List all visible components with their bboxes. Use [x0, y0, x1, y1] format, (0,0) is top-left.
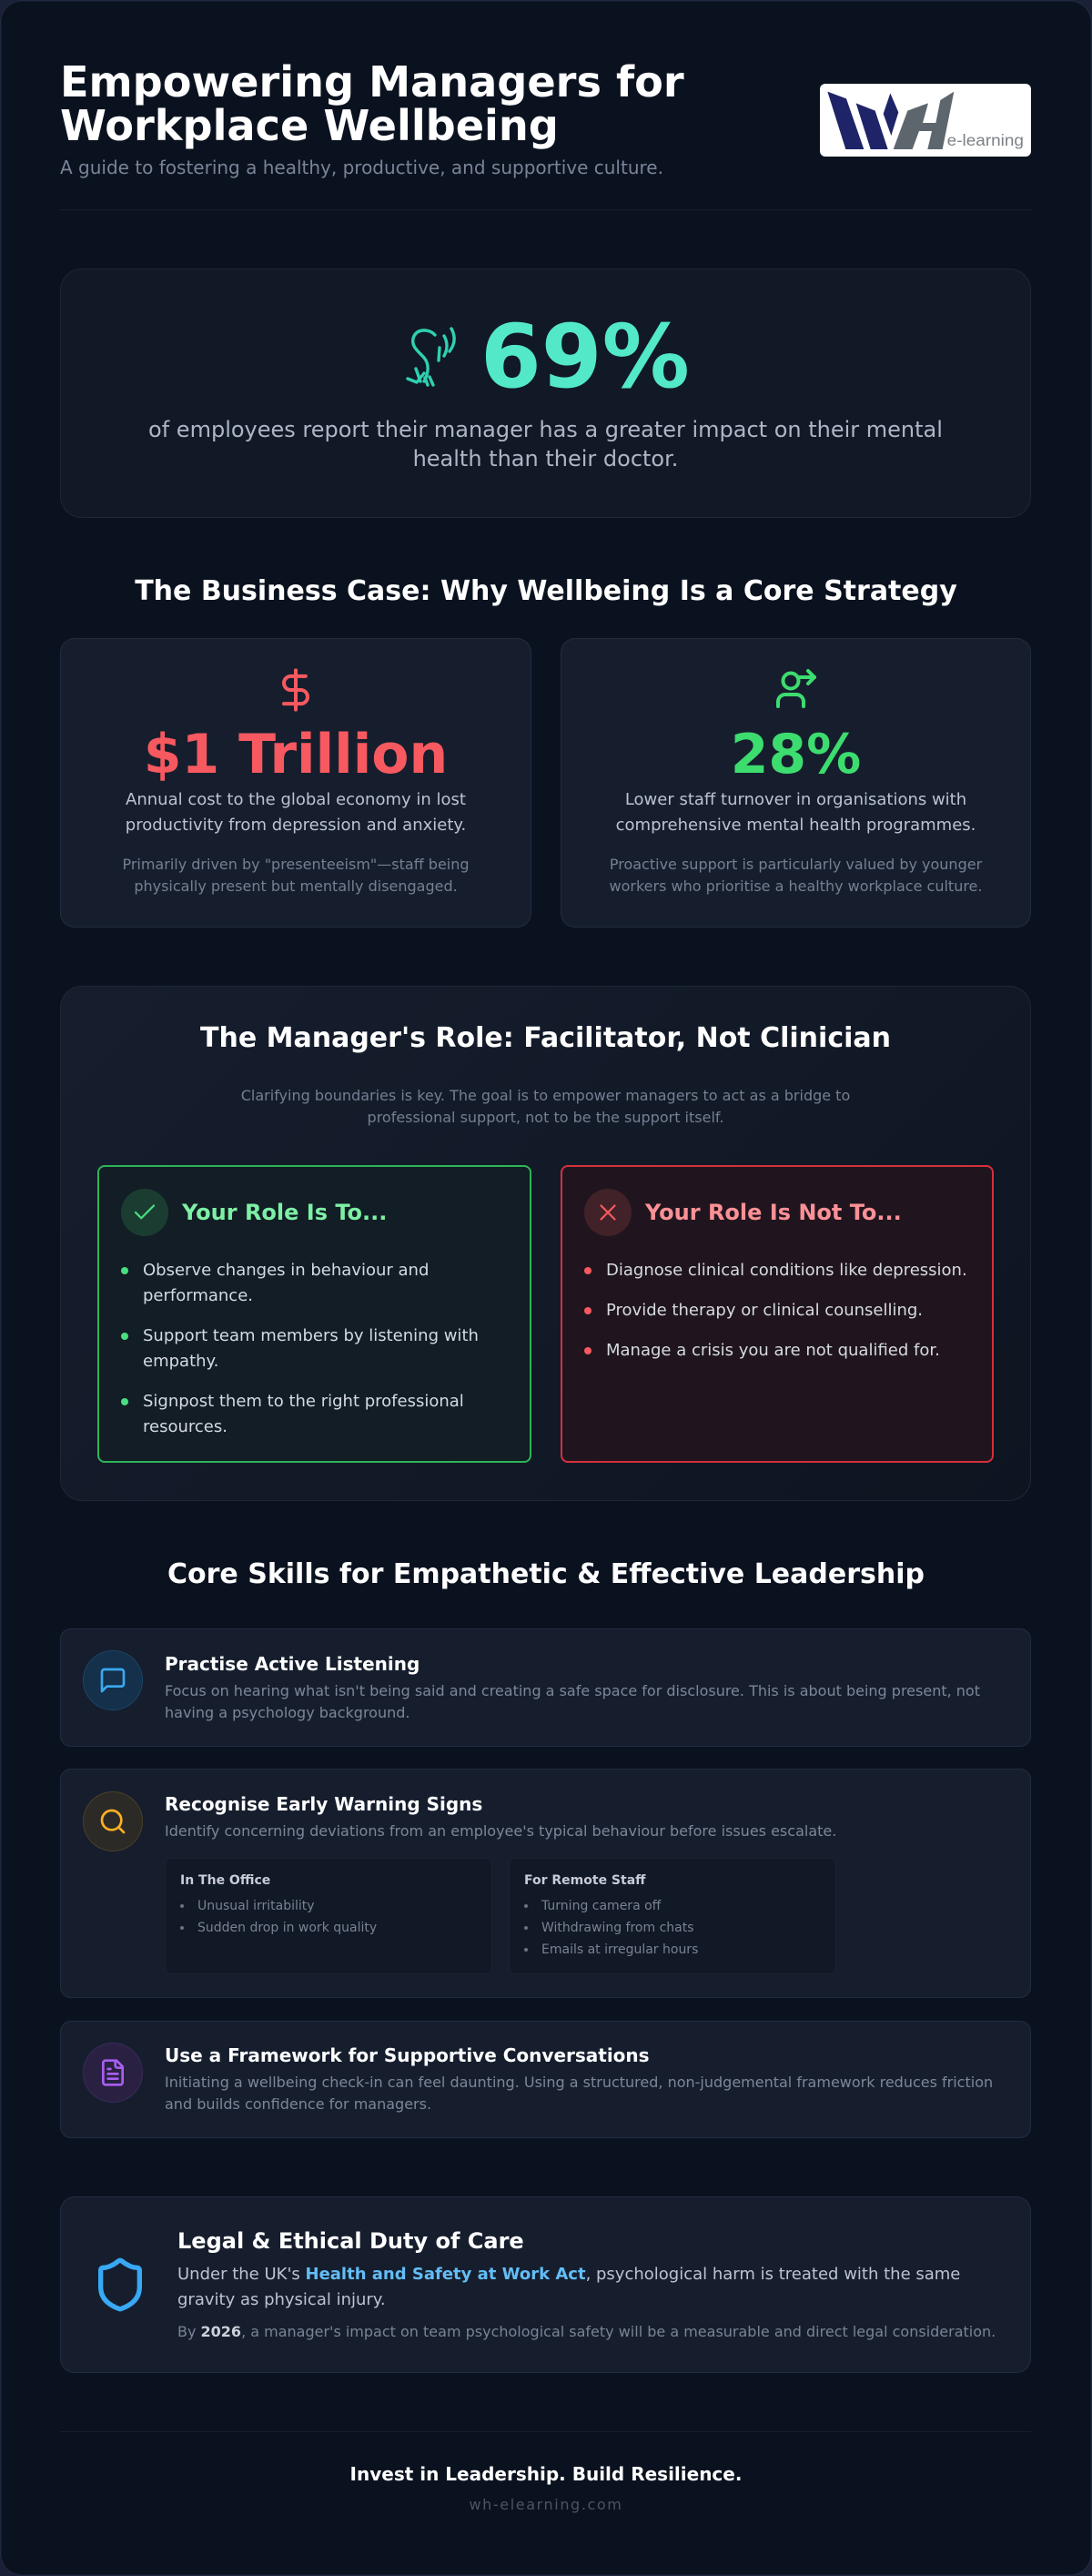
skill title: Use a Framework for Supportive Conversations — [165, 2044, 650, 2066]
note: Primarily driven by "presenteeism"—staff being — [122, 856, 470, 873]
sub heading: In The Office — [180, 1873, 270, 1888]
heading: The Manager's Role: Facilitator, Not Clinician — [200, 1022, 891, 1054]
big number: 69% — [480, 306, 690, 408]
panel: turnover stat — [561, 638, 1031, 928]
subtitle: A guide to fostering a healthy, productive, and supportive culture. — [60, 157, 663, 178]
hero text — [148, 417, 943, 472]
panel: legal duty of care — [60, 2196, 1031, 2373]
list items: empathy. — [143, 1352, 218, 1371]
panel: not your role — [561, 1165, 994, 1463]
icon: check — [121, 1189, 168, 1236]
logo: WH e-learning — [820, 84, 1031, 157]
sub heading: For Remote Staff — [524, 1873, 646, 1888]
description: productivity from depression and anxiety. — [126, 816, 466, 835]
icon: dollar — [282, 668, 309, 712]
number: $1 Trillion — [144, 723, 448, 786]
not role list contents — [584, 1189, 967, 1360]
icon: chat bubble — [83, 1650, 143, 1710]
heading: business case: The Business Case: Why Wellbeing Is a Core Strategy — [135, 575, 957, 607]
skill text: Focus on hearing what isn't being said and creating a safe space for disclosure. This is about being present, not — [165, 1682, 980, 1699]
logo: WH e-learning: e-learning — [947, 131, 1024, 149]
list: Unusual irritability — [197, 1899, 315, 1913]
panel: early warning signs — [60, 1769, 1031, 1998]
icon: shield — [98, 2257, 142, 2312]
title: Workplace Wellbeing — [60, 101, 559, 150]
panel: framework — [60, 2021, 1031, 2138]
skill text — [165, 2074, 993, 2113]
role list contents — [121, 1189, 479, 1436]
hero text: of employees report their manager has a greater impact on their mental — [148, 417, 943, 442]
legal text: gravity as physical injury. — [177, 2290, 386, 2309]
skill title: Practise Active Listening — [165, 1653, 420, 1675]
skill text: and builds confidence for managers. — [165, 2095, 431, 2113]
icon: magnifier — [83, 1791, 143, 1851]
list — [180, 1899, 377, 1935]
list: Turning camera off — [541, 1899, 661, 1913]
panel: your role — [97, 1165, 531, 1463]
number: 28% — [731, 723, 861, 786]
list items: Manage a crisis you are not qualified for. — [606, 1341, 940, 1360]
list: Withdrawing from chats — [541, 1921, 694, 1935]
description: Lower staff turnover in organisations with — [625, 790, 966, 809]
legal text — [177, 2265, 960, 2309]
sub-panel: remote staff — [509, 1858, 836, 1974]
skill title: Recognise Early Warning Signs — [165, 1793, 482, 1815]
sub-panel: in the office — [165, 1858, 492, 1974]
description: comprehensive mental health programmes. — [616, 816, 976, 835]
list items — [584, 1261, 967, 1360]
heading: Your Role Is Not To... — [645, 1200, 902, 1225]
list items: Provide therapy or clinical counselling. — [606, 1301, 923, 1320]
skill text: Initiating a wellbeing check-in can feel daunting. Using a structured, non-judgemental framework reduces friction — [165, 2074, 993, 2091]
icon: cross — [584, 1189, 632, 1236]
list items: Signpost them to the right professional — [143, 1392, 464, 1411]
list: Emails at irregular hours — [541, 1942, 698, 1957]
panel: active listening — [60, 1628, 1031, 1747]
heading: Your Role Is To... — [182, 1200, 387, 1225]
skill text: Identify concerning deviations from an employee's typical behaviour before issues escalate. — [165, 1822, 836, 1839]
title: Empowering Managers for — [60, 57, 684, 106]
description — [616, 790, 976, 835]
description — [126, 790, 466, 835]
intro text — [241, 1087, 850, 1125]
skill text — [165, 1682, 980, 1721]
header — [60, 57, 1031, 178]
panel: manager's role — [60, 986, 1031, 1501]
note — [610, 856, 983, 895]
icon: user arrow — [776, 668, 817, 708]
skill text: having a psychology background. — [165, 1704, 410, 1721]
list items: resources. — [143, 1417, 228, 1436]
icon: document — [83, 2043, 143, 2103]
legal text: Under the UK's Health and Safety at Work Act, psychological harm is treated with the same — [177, 2265, 960, 2284]
heading: core skills: Core Skills for Empathetic & Effective Leadership — [167, 1558, 925, 1590]
list: Sudden drop in work quality — [197, 1921, 377, 1935]
intro text: Clarifying boundaries is key. The goal is to empower managers to act as a bridge to — [241, 1087, 850, 1103]
note: workers who prioritise a healthy workplace culture. — [610, 877, 982, 895]
description: Annual cost to the global economy in lost — [126, 790, 466, 809]
intro text: professional support, not to be the support itself. — [368, 1109, 723, 1125]
list items — [121, 1261, 479, 1436]
list items: Support team members by listening with — [143, 1326, 479, 1345]
title — [60, 57, 684, 150]
list items: Diagnose clinical conditions like depression. — [606, 1261, 967, 1280]
footer url: wh-elearning.com — [470, 2496, 622, 2513]
note — [122, 856, 470, 895]
icon: ear — [406, 327, 456, 387]
footer tagline: Invest in Leadership. Build Resilience. — [350, 2463, 742, 2485]
note: physically present but mentally disengaged. — [134, 877, 458, 895]
list — [524, 1899, 698, 1957]
note: Proactive support is particularly valued by younger — [610, 856, 982, 873]
legal note: By 2026, a manager's impact on team psychological safety will be a measurable and direct legal consideration. — [177, 2323, 996, 2340]
list items: performance. — [143, 1286, 253, 1305]
hero text: health than their doctor. — [413, 446, 678, 472]
list items: Observe changes in behaviour and — [143, 1261, 429, 1280]
panel: hero statistic — [60, 269, 1031, 518]
footer — [350, 2463, 742, 2513]
panel: cost stat — [60, 638, 531, 928]
legal title: Legal & Ethical Duty of Care — [177, 2228, 524, 2254]
